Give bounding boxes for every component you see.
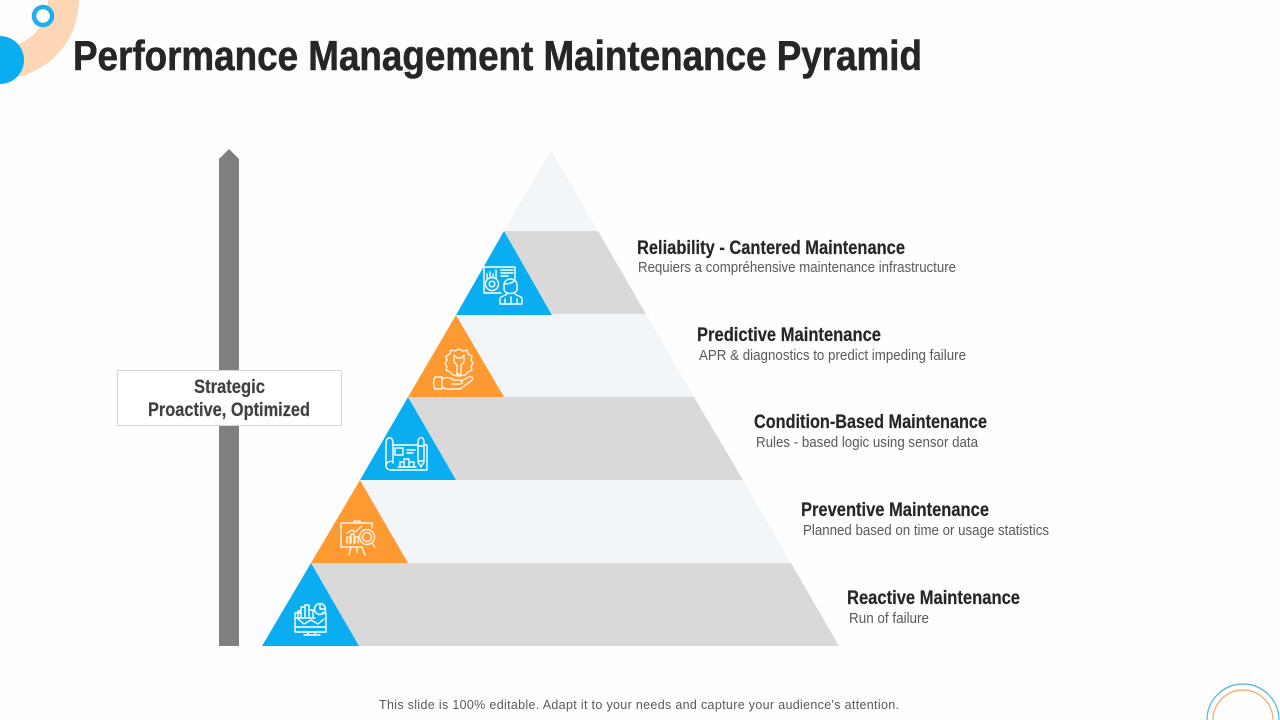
text block: condition-based: Condition-Based Maintenance bbox=[754, 412, 987, 433]
text block: condition-based: Rules - based logic using sensor data bbox=[756, 434, 979, 451]
icon: presentation board with magnifier bbox=[341, 521, 375, 555]
text block: reactive: Run of failure bbox=[849, 610, 929, 627]
triangle: blue 3 bbox=[360, 397, 456, 480]
footer note: This slide is 100% editable. Adapt it to your needs and capture your audience's attention. bbox=[379, 698, 899, 712]
callout: strategic label bbox=[118, 370, 342, 426]
icon: monitor with charts bbox=[295, 604, 326, 635]
text block: reactive: Reactive Maintenance bbox=[847, 588, 1020, 609]
text block: preventive: Preventive Maintenance bbox=[801, 500, 989, 521]
text block: preventive: Planned based on time or usage statistics bbox=[803, 522, 1049, 539]
icon: hand holding gear bbox=[434, 349, 473, 389]
icon: blueprint and pencil bbox=[386, 438, 427, 470]
title: Performance Management Maintenance Pyramid bbox=[73, 32, 922, 79]
triangle: blue 1 bbox=[456, 231, 552, 315]
text block: preventive bbox=[801, 500, 1049, 539]
pyramid apex bbox=[504, 150, 598, 231]
triangle: blue 5 bbox=[262, 563, 359, 646]
text block: reliability bbox=[637, 238, 956, 276]
arrow: strategic axis bbox=[219, 149, 239, 646]
band: reactive bbox=[311, 563, 839, 646]
text block: predictive bbox=[697, 325, 966, 364]
band: predictive bbox=[456, 314, 694, 397]
band: condition-based bbox=[408, 397, 743, 480]
text block: predictive: Predictive Maintenance bbox=[697, 325, 881, 346]
callout: strategic label: Proactive, Optimized bbox=[148, 400, 310, 421]
text block: predictive: APR & diagnostics to predict impeding failure bbox=[699, 347, 966, 364]
text block: reliability: Reliability - Cantered Maintenance bbox=[637, 238, 905, 259]
band: preventive bbox=[360, 480, 791, 563]
icon: presenter with dashboard bbox=[484, 267, 522, 304]
triangle: orange 4 bbox=[311, 480, 408, 563]
text block: condition-based bbox=[754, 412, 987, 451]
decoration: bottom-right rings bbox=[1207, 684, 1279, 720]
text block: reliability: Requiers a compréhensive maintenance infrastructure bbox=[638, 259, 956, 276]
text block: reactive bbox=[847, 588, 1020, 627]
pyramid chart bbox=[262, 150, 839, 646]
decoration: top-left circles bbox=[0, 0, 79, 84]
callout: strategic label: Strategic bbox=[194, 377, 265, 398]
triangle: orange 2 bbox=[408, 315, 504, 397]
band: reliability bbox=[504, 231, 646, 314]
